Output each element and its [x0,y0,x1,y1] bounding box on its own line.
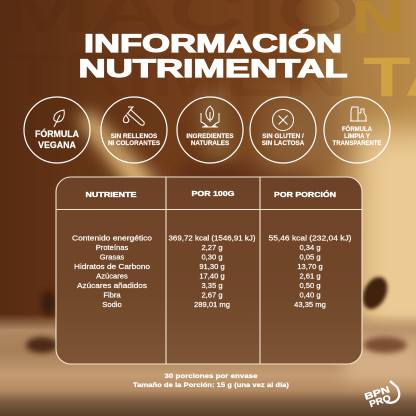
column: por 100g: 17,40 g [199,272,225,280]
icon: leaf [54,110,64,127]
column: nutriente: Azúcares [96,272,128,280]
column: por 100g: 2,67 g [201,290,223,300]
badge: sin rellenos [101,97,167,163]
icon: test tube and drop [123,107,144,125]
label: sin rellenos: SIN RELLENOS [111,133,157,140]
icon: bottles [350,107,367,121]
title [78,28,348,83]
column: nutriente: Hidratos de Carbono [74,262,150,271]
badge: fórmula limpia [324,97,390,163]
column: por porción: 0,05 g [299,252,321,262]
column: por 100g: 0,30 g [201,252,223,262]
column: por porción: 0,34 g [299,243,321,252]
column: por porción: 0,50 g [299,281,321,290]
column: por porción: 0,40 g [299,290,321,300]
label: ingredientes naturales [186,133,234,147]
label: sin gluten [262,133,305,147]
table header: NUTRIENTE [86,190,137,199]
label: sin gluten: SIN LACTOSA [262,140,305,147]
column: nutriente: Sodio [102,300,122,309]
footer note [133,373,289,389]
footer note: 30 porciones por envase [164,373,258,380]
logo: BPN PRO: BPN [363,384,391,402]
label: fórmula vegana [35,128,80,150]
label: fórmula limpia: LIMPIA Y [344,134,370,140]
badge: fórmula vegana [24,97,90,163]
label: fórmula limpia: TRANSPARENTE [333,141,381,147]
background oversized title watermark [0,0,416,109]
logo: BPN PRO: PRO [368,393,392,409]
title: INFORMACIÓN [84,28,342,58]
label: fórmula limpia [333,125,381,147]
column: por porción: 13,70 g [297,262,323,271]
logo: BPN PRO [363,381,399,409]
label: sin gluten: SIN GLUTEN / [262,133,304,140]
label: ingredientes naturales: NATURALES [191,140,229,147]
title: NUTRIMENTAL [78,55,348,83]
column: nutriente [72,234,152,309]
column: nutriente: Fibra [103,290,121,300]
column: por porción: 55,46 kcal (232,04 kJ) [268,234,352,242]
label: fórmula vegana: FÓRMULA [35,128,80,139]
column: nutriente: Proteínas [96,243,128,252]
nutrition table panel [56,177,362,364]
column: por 100g: 3,35 g [201,281,223,290]
table header: POR PORCIÓN [274,190,336,199]
footer note: Tamaño de la Porción: 15 g (una vez al día) [133,382,289,389]
column: por porción: 43,35 mg [294,300,326,309]
column: por 100g: 91,30 g [199,262,225,271]
column: nutriente: Grasas [100,252,124,262]
icon: crossed circle [272,110,294,130]
badge: ingredientes naturales [177,97,243,163]
label: fórmula vegana: VEGANA [38,140,76,150]
label: sin rellenos [108,133,160,147]
column: por 100g: 289,01 mg [194,300,230,309]
label: fórmula limpia: FÓRMULA [342,125,373,133]
column: nutriente: Contenido energético [72,234,152,242]
column: por porción [268,234,352,309]
column: por 100g: 369,72 kcal (1546,91 kJ) [168,234,256,242]
table header: POR 100G [192,189,235,198]
table header [86,189,336,199]
label: ingredientes naturales: INGREDIENTES [186,133,234,140]
label: sin rellenos: NI COLORANTES [108,140,160,147]
badge: sin gluten [250,97,316,163]
column: por 100g [168,234,256,309]
column: por porción: 2,61 g [299,272,321,280]
column: nutriente: Azúcares añadidos [77,281,147,290]
background oversized title watermark: TRIMEN [8,42,348,109]
icon: hands holding plant [201,106,219,127]
column: por 100g: 2,27 g [201,243,223,252]
